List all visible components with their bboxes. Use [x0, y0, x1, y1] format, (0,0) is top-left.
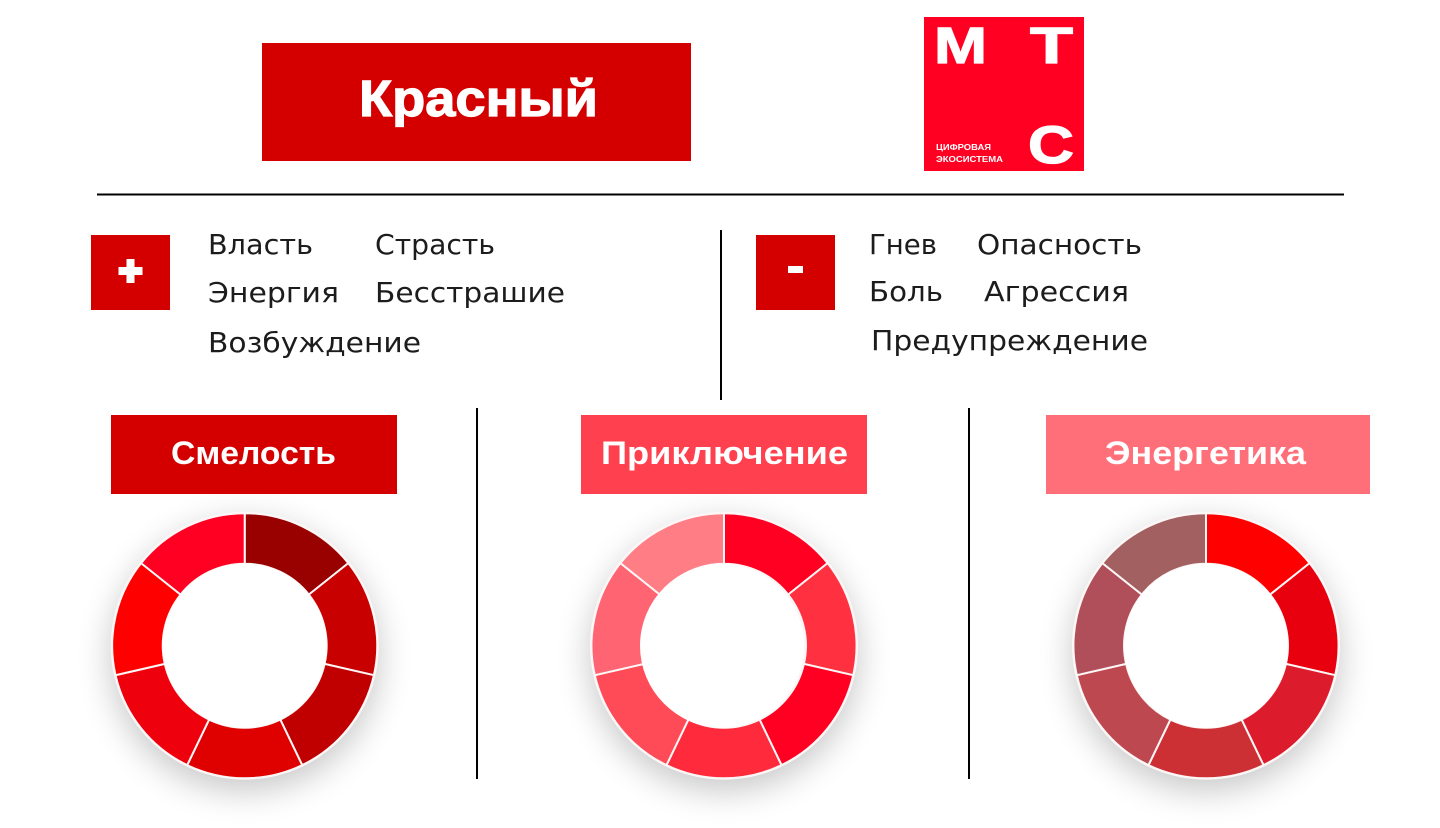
panel: negative associations	[756, 228, 1148, 357]
logo: MTS: М	[934, 17, 987, 74]
panel: Энергетика	[1046, 415, 1370, 791]
heading: Энергетика	[1046, 415, 1370, 494]
positive words: Бесстрашие	[375, 276, 565, 309]
positive words: Власть	[208, 228, 313, 261]
donut chart: Смелость	[111, 512, 379, 791]
icon: plus	[91, 235, 170, 310]
logo: MTS	[924, 17, 1084, 175]
heading: Приключение: Приключение	[601, 435, 848, 471]
positive words: Энергия	[208, 276, 339, 309]
negative words: Боль	[869, 275, 943, 308]
panel: Смелость	[111, 415, 397, 791]
logo: MTS: С	[1028, 116, 1074, 175]
negative words: Опасность	[977, 228, 1142, 261]
logo: MTS: ЦИФРОВАЯ	[936, 143, 991, 152]
panel: positive associations	[91, 228, 565, 359]
logo: MTS: ЭКОСИСТЕМА	[936, 155, 1003, 164]
title banner	[262, 43, 691, 161]
negative words: Гнев	[869, 228, 937, 261]
icon: minus	[756, 235, 835, 310]
heading: Смелость	[111, 415, 397, 494]
title text: Красный	[359, 70, 598, 127]
positive words: Страсть	[375, 228, 495, 261]
negative words: Предупреждение	[871, 324, 1148, 357]
donut chart: Приключение	[590, 512, 858, 791]
positive words: Возбуждение	[208, 326, 421, 359]
positive words	[208, 228, 565, 359]
panel: Приключение	[581, 415, 867, 791]
heading: Энергетика: Энергетика	[1105, 435, 1306, 471]
negative words: Агрессия	[984, 275, 1129, 308]
heading: Смелость: Смелость	[171, 435, 336, 471]
donut chart: Энергетика	[1072, 512, 1340, 791]
heading: Приключение	[581, 415, 867, 494]
negative words	[869, 228, 1148, 357]
logo: MTS: Т	[1030, 17, 1073, 74]
